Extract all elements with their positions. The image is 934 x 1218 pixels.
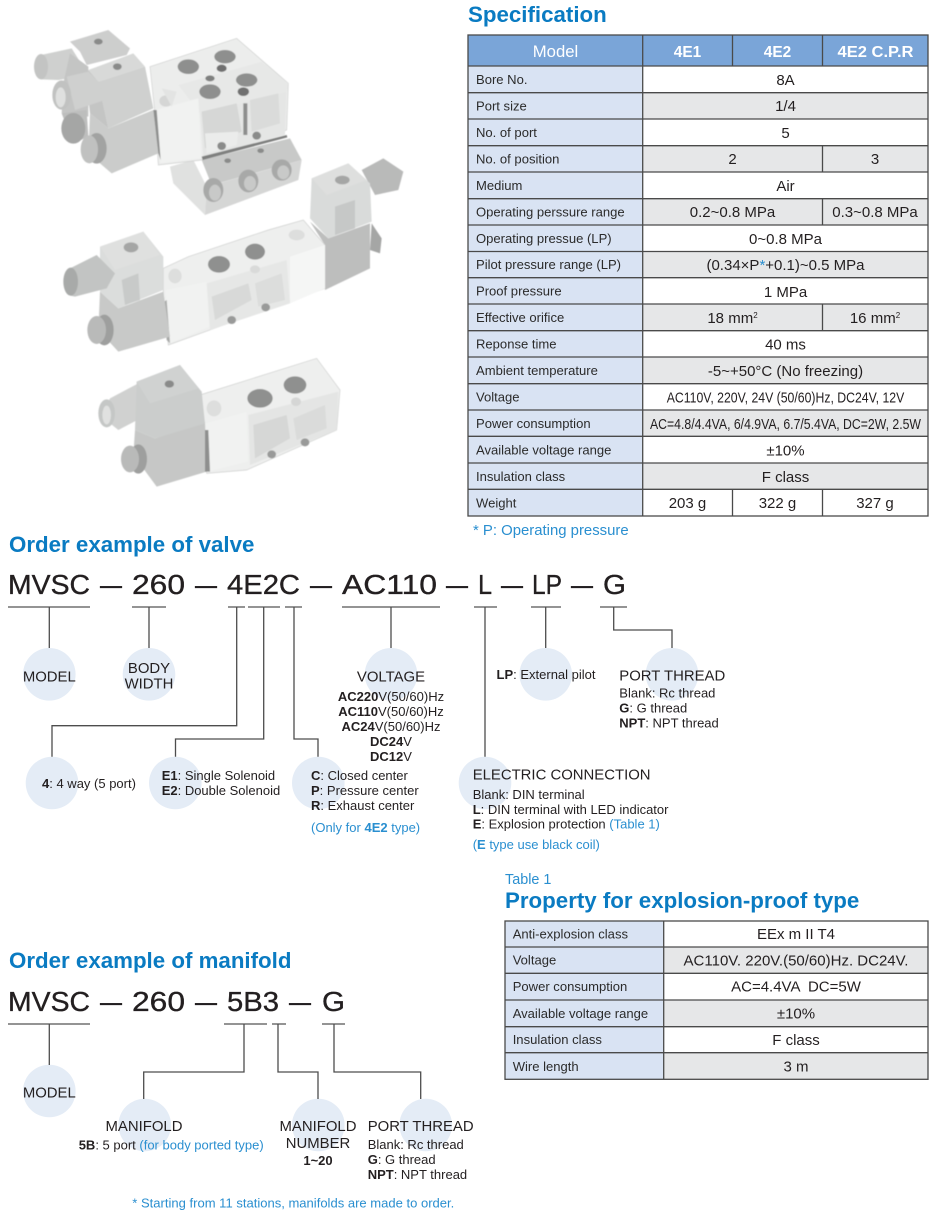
- table row labels: [476, 72, 625, 510]
- table header row: 4E1: [674, 44, 702, 61]
- label: voltage: DC12V: [370, 749, 412, 764]
- code letters: G: [603, 569, 626, 600]
- table header row: 4E2: [764, 44, 791, 61]
- label: port thread: G: G thread: [619, 701, 687, 716]
- table values: 5: [781, 125, 790, 142]
- table row labels: Proof pressure: [476, 284, 562, 298]
- heading: Specification: Specification: [468, 2, 607, 27]
- label: electric connection: [473, 768, 669, 852]
- label: center types: P: Pressure center: [311, 783, 419, 798]
- label: body width: [125, 661, 173, 692]
- heading: Order example of manifold: Order example of manifold: [9, 948, 292, 973]
- table values: 2: [896, 311, 901, 320]
- table values: 18 mm: [707, 310, 753, 327]
- label: solenoid types: [162, 768, 280, 798]
- label: electric connection: E: Explosion protection (Table 1): [473, 816, 660, 832]
- table labels: Wire length: [513, 1059, 579, 1074]
- code letters: G: [322, 986, 345, 1017]
- table labels: Power consumption: [513, 979, 627, 994]
- label: external pilot: LP: External pilot: [496, 667, 596, 682]
- underlines: [8, 1023, 345, 1025]
- caption: Table 1: Table 1: [505, 872, 551, 888]
- label: voltage: AC24V(50/60)Hz: [342, 719, 440, 734]
- table grid: [468, 35, 928, 516]
- label: body width: BODY: [128, 661, 170, 677]
- label: body width: WIDTH: [125, 676, 173, 692]
- table values: 16 mm: [850, 310, 896, 327]
- table row labels: Medium: [476, 178, 523, 193]
- table header row: Model: [533, 42, 578, 61]
- code letters: [8, 569, 626, 600]
- product photo: three solenoid valves: [34, 30, 403, 487]
- table row labels: Ambient temperature: [476, 363, 598, 378]
- table row labels: Effective orifice: [476, 310, 564, 325]
- label: port thread: Blank: Rc thread: [368, 1137, 464, 1152]
- code letters: —: [501, 569, 523, 600]
- table values: [650, 72, 922, 512]
- table labels: [513, 926, 648, 1074]
- underlines: [8, 606, 627, 608]
- code letters: MVSC: [8, 986, 90, 1017]
- code letters: —: [100, 986, 122, 1017]
- table values: F class: [772, 1032, 820, 1049]
- code letters: —: [446, 569, 468, 600]
- table values: 1 MPa: [764, 284, 808, 301]
- code letters: 260: [132, 569, 185, 600]
- label: port thread: Blank: Rc thread: [619, 686, 715, 701]
- code letters: L: [478, 569, 492, 600]
- table values: 2: [753, 311, 758, 320]
- table values: (0.34×P*+0.1)~0.5 MPa: [706, 257, 865, 274]
- table grid: [505, 921, 928, 1079]
- table row labels: Weight: [476, 496, 517, 510]
- table row labels: Reponse time: [476, 336, 556, 352]
- label: manifold number: NUMBER: [286, 1136, 351, 1152]
- table labels: Insulation class: [513, 1032, 602, 1047]
- table values: 0~0.8 MPa: [749, 231, 823, 248]
- single solenoid valve: [98, 358, 340, 487]
- table row labels: Operating pressue (LP): [476, 231, 612, 246]
- footnote: manifolds made to order: * Starting from 11 stations, manifolds are made to order.: [132, 1195, 454, 1210]
- label: electric connection: Blank: DIN terminal: [473, 787, 585, 802]
- label: center types: [311, 768, 420, 835]
- connectors: [49, 1024, 421, 1099]
- diagram: valve order code: [8, 569, 725, 852]
- code letters: —: [289, 986, 311, 1017]
- label: voltage: [338, 670, 444, 764]
- code letters: AC110: [342, 569, 437, 600]
- label: voltage: AC220V(50/60)Hz: [338, 689, 444, 704]
- table values: 2: [728, 151, 737, 168]
- valve with transparent connectors: [63, 158, 403, 352]
- label: port thread: G: G thread: [368, 1152, 436, 1167]
- code letters: —: [195, 569, 217, 600]
- table row labels: Bore No.: [476, 72, 528, 87]
- table fills: [505, 921, 928, 1079]
- table values: AC=4.4VA DC=5W: [731, 978, 862, 996]
- diagram: manifold order code: [8, 986, 474, 1182]
- table: specification: [468, 35, 928, 516]
- table row labels: Available voltage range: [476, 442, 611, 458]
- table values: Air: [776, 178, 795, 195]
- table row labels: No. of port: [476, 125, 537, 140]
- table values: F class: [762, 469, 809, 486]
- label: port thread: NPT: NPT thread: [619, 716, 719, 731]
- label: port thread: [368, 1119, 474, 1182]
- code letters: 260: [132, 986, 185, 1017]
- label: electric connection: (E type use black coil): [473, 837, 600, 852]
- table values: 0.2~0.8 MPa: [690, 204, 776, 221]
- label: voltage: AC110V(50/60)Hz: [338, 704, 444, 719]
- table row labels: Voltage: [476, 390, 520, 404]
- table header row: [468, 35, 928, 66]
- label: electric connection: ELECTRIC CONNECTION: [473, 768, 651, 784]
- label: port thread: PORT THREAD: [368, 1119, 474, 1135]
- code letters: 4E2C: [227, 569, 300, 600]
- label: manifold: [79, 1119, 264, 1152]
- label: model: MODEL: [23, 1086, 76, 1102]
- table values: 0.3~0.8 MPa: [832, 204, 918, 221]
- label: manifold number: MANIFOLD: [280, 1119, 357, 1135]
- table values: -5~+50°C (No freezing): [708, 363, 863, 380]
- table values: 322 g: [759, 495, 796, 512]
- label: port thread: [619, 668, 725, 731]
- label: center types: C: Closed center: [311, 768, 408, 783]
- label: voltage: DC24V: [370, 734, 412, 749]
- table row fills: [468, 66, 928, 516]
- table values: EEx m II T4: [757, 926, 835, 943]
- code letters: —: [100, 569, 122, 600]
- code letters: 5B3: [227, 986, 279, 1017]
- code letters: —: [571, 569, 593, 600]
- table row labels: No. of position: [476, 152, 559, 166]
- label: port thread: NPT: NPT thread: [368, 1167, 467, 1182]
- table values: 40 ms: [765, 336, 806, 354]
- table labels: Available voltage range: [513, 1006, 648, 1021]
- table values: [684, 926, 908, 1076]
- table labels: Voltage: [513, 952, 556, 968]
- background circles: [23, 648, 698, 809]
- label: model: MODEL: [23, 670, 76, 686]
- label: electric connection: L: DIN terminal with LED indicator: [473, 802, 669, 817]
- label: center types: (Only for 4E2 type): [311, 820, 420, 835]
- label: manifold: 5B: 5 port (for body ported type): [79, 1137, 264, 1152]
- table row labels: Pilot pressure range (LP): [476, 257, 621, 272]
- table values: ±10%: [777, 1006, 815, 1022]
- background circles: [23, 1065, 452, 1151]
- label: port thread: PORT THREAD: [619, 668, 725, 684]
- label: 4 way: 4: 4 way (5 port): [42, 776, 136, 791]
- table values: 3 m: [783, 1058, 809, 1076]
- label: solenoid types: E1: Single Solenoid: [162, 768, 275, 783]
- code letters: —: [310, 569, 332, 600]
- label: manifold number: [280, 1119, 357, 1168]
- heading: Property for explosion-proof type: Property for explosion-proof type: [505, 888, 859, 913]
- table row labels: Port size: [476, 98, 527, 114]
- table values: 1/4: [775, 98, 796, 115]
- label: solenoid types: E2: Double Solenoid: [162, 783, 280, 798]
- table values: 3: [871, 151, 879, 168]
- valve on manifold: [34, 30, 302, 215]
- table values: AC110V. 220V.(50/60)Hz. DC24V.: [684, 952, 908, 970]
- table row labels: Operating perssure range: [476, 204, 625, 220]
- code letters: —: [195, 986, 217, 1017]
- heading: Order example of valve: Order example of valve: [9, 532, 254, 557]
- code letters: LP: [532, 569, 562, 600]
- table header row: 4E2 C.P.R: [838, 44, 914, 61]
- table row labels: Power consumption: [476, 416, 591, 431]
- footnote: P operating pressure: * P: Operating pressure: [473, 523, 629, 539]
- table values: 8A: [776, 72, 795, 89]
- table values: 203 g: [669, 495, 706, 512]
- code letters: MVSC: [8, 569, 90, 600]
- label: manifold: MANIFOLD: [106, 1119, 183, 1135]
- connectors: [49, 607, 672, 757]
- table: explosion-proof properties: [505, 921, 928, 1079]
- label: manifold number: 1~20: [303, 1153, 333, 1168]
- table values: ±10%: [766, 442, 805, 460]
- table row labels: Insulation class: [476, 469, 566, 484]
- code letters: [8, 986, 345, 1017]
- table values: 327 g: [856, 495, 894, 512]
- label: center types: R: Exhaust center: [311, 798, 415, 813]
- table labels: Anti-explosion class: [513, 926, 628, 942]
- label: voltage: VOLTAGE: [357, 670, 425, 686]
